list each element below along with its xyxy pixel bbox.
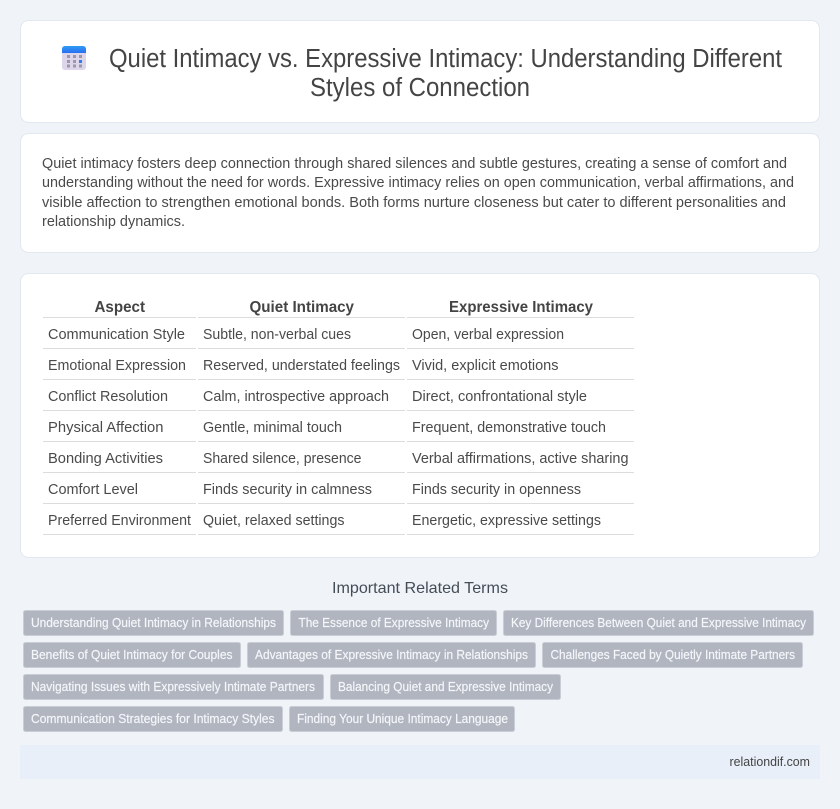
row: communication style: Open, verbal expression bbox=[412, 327, 564, 343]
row: preferred environment: Quiet, relaxed settings bbox=[203, 513, 344, 529]
tag bbox=[24, 642, 240, 668]
row: comfort level: Finds security in openness bbox=[412, 482, 581, 498]
tag bbox=[24, 674, 324, 700]
tag: Key Differences Between Quiet and Expressive Intimacy bbox=[511, 616, 807, 630]
row: physical affection: Physical Affection bbox=[48, 420, 164, 436]
panel: intro paragraph bbox=[20, 134, 820, 252]
row: bonding activities: Verbal affirmations, active sharing bbox=[412, 451, 628, 467]
table header bbox=[94, 299, 593, 316]
table header: Expressive Intimacy bbox=[449, 299, 593, 316]
row: physical affection: Frequent, demonstrative touch bbox=[412, 420, 606, 436]
intro text bbox=[42, 156, 794, 230]
row: communication style: Subtle, non-verbal cues bbox=[203, 327, 351, 343]
row: preferred environment: Energetic, expressive settings bbox=[412, 513, 601, 529]
row: communication style: Communication Style bbox=[48, 327, 185, 343]
panel: comparison table bbox=[20, 274, 820, 558]
title: Quiet Intimacy vs. Expressive Intimacy: Understanding Different bbox=[109, 45, 782, 73]
row: bonding activities: Bonding Activities bbox=[48, 451, 163, 467]
title: Styles of Connection bbox=[310, 74, 530, 102]
table header: Aspect bbox=[94, 299, 145, 316]
tag: Finding Your Unique Intimacy Language bbox=[297, 712, 508, 726]
tag: Advantages of Expressive Intimacy in Relationships bbox=[255, 648, 528, 662]
title bbox=[109, 45, 782, 102]
tag bbox=[248, 642, 536, 668]
row: emotional expression bbox=[48, 358, 558, 374]
tag bbox=[504, 610, 814, 636]
icon: calendar bbox=[62, 46, 86, 70]
row: comfort level: Finds security in calmness bbox=[203, 482, 372, 498]
intro text: visible affection to strengthen emotional bonds. Both forms nurture closeness but cater to different personalities and bbox=[42, 195, 786, 211]
row: preferred environment bbox=[48, 513, 601, 529]
tag: Challenges Faced by Quietly Intimate Partners bbox=[550, 648, 795, 662]
row: emotional expression: Emotional Expression bbox=[48, 358, 186, 374]
footer source: relationdif.com bbox=[730, 755, 810, 769]
tag bbox=[542, 642, 802, 668]
intro text: understanding without the need for words. Expressive intimacy relies on open communication, verbal affirmations, and bbox=[42, 175, 794, 191]
table header: Quiet Intimacy bbox=[250, 299, 354, 316]
row: emotional expression: Reserved, understated feelings bbox=[203, 358, 400, 374]
row: physical affection bbox=[48, 420, 606, 436]
tag: Communication Strategies for Intimacy Styles bbox=[31, 712, 274, 726]
row: communication style bbox=[48, 327, 564, 343]
tag: Benefits of Quiet Intimacy for Couples bbox=[31, 648, 232, 662]
tag: The Essence of Expressive Intimacy bbox=[298, 616, 490, 630]
header panel bbox=[20, 20, 820, 122]
row: conflict resolution: Calm, introspective approach bbox=[203, 389, 389, 405]
tag bbox=[330, 674, 560, 700]
related terms tags bbox=[24, 610, 814, 732]
tag: Balancing Quiet and Expressive Intimacy bbox=[338, 680, 554, 694]
row: bonding activities bbox=[48, 451, 628, 467]
tag bbox=[290, 706, 514, 732]
tag bbox=[24, 610, 284, 636]
tag bbox=[24, 706, 282, 732]
row: comfort level bbox=[48, 482, 581, 498]
row: bonding activities: Shared silence, presence bbox=[203, 451, 362, 467]
heading: important related terms: Important Related Terms bbox=[332, 580, 508, 597]
table rules bbox=[43, 317, 634, 535]
row: comfort level: Comfort Level bbox=[48, 482, 138, 498]
intro text: Quiet intimacy fosters deep connection through shared silences and subtle gestures, creating a sense of comfort and bbox=[42, 156, 787, 172]
row: conflict resolution: Conflict Resolution bbox=[48, 389, 168, 405]
row: conflict resolution bbox=[48, 389, 587, 405]
tag: Navigating Issues with Expressively Intimate Partners bbox=[31, 680, 315, 694]
row: emotional expression: Vivid, explicit emotions bbox=[412, 358, 558, 374]
tag bbox=[290, 610, 496, 636]
row: physical affection: Gentle, minimal touch bbox=[203, 420, 342, 436]
intro text: relationship dynamics. bbox=[42, 214, 185, 230]
row: conflict resolution: Direct, confrontational style bbox=[412, 389, 587, 405]
row: preferred environment: Preferred Environment bbox=[48, 513, 191, 529]
footer bar bbox=[20, 745, 820, 779]
tag: Understanding Quiet Intimacy in Relationships bbox=[31, 616, 276, 630]
